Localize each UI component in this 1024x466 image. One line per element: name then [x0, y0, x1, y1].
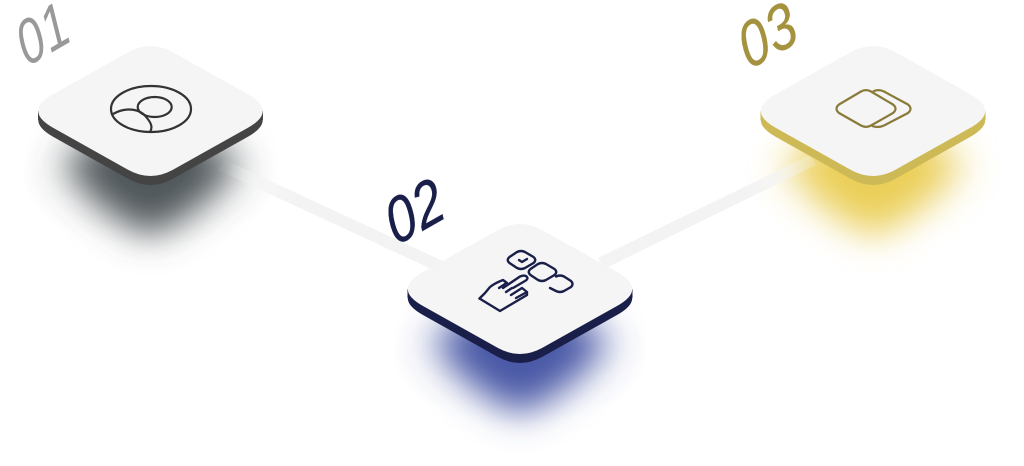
card: step 2 — [408, 224, 632, 363]
icon: hand selecting checkboxes — [480, 251, 572, 311]
icon: stacked layers — [836, 90, 910, 127]
shadow: step 2 glow — [400, 288, 640, 415]
number: 02: 02 — [375, 164, 455, 259]
connector: step 1 to step 2 — [218, 160, 445, 272]
connector: step 2 to step 3 — [598, 155, 816, 269]
icon: overlapping circles — [111, 86, 191, 132]
card: step 3 — [760, 46, 986, 185]
shadow: step 1 glow — [30, 110, 270, 237]
card: step 1 — [38, 46, 263, 185]
shadow: step 3 glow — [753, 110, 993, 237]
